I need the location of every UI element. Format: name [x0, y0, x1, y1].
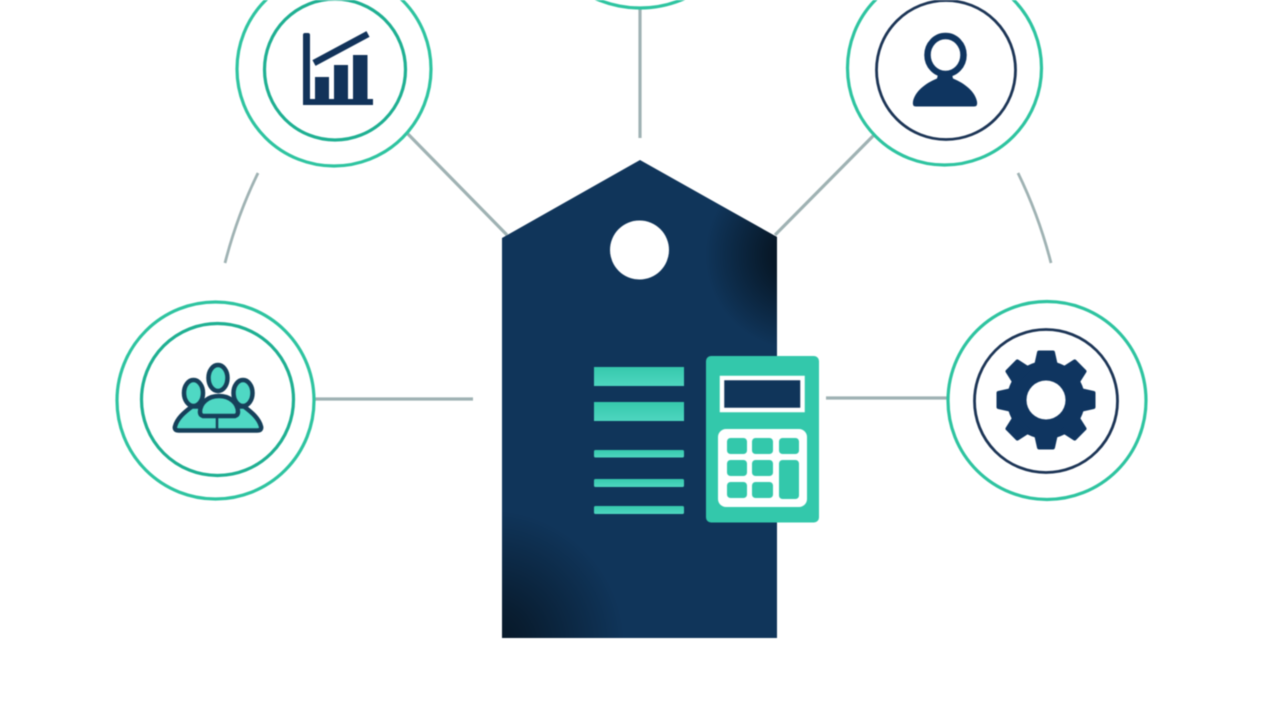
- icon: bar chart: [303, 33, 373, 105]
- ring: inner: [142, 324, 294, 476]
- ring: inner: [264, 0, 406, 140]
- tag shading: bottom left: [502, 160, 777, 638]
- text lines: [594, 367, 684, 514]
- node: analytics: [237, 0, 431, 166]
- connector lines: [225, 8, 1051, 399]
- node: team: [117, 302, 314, 499]
- node: top centre (cropped): [530, 0, 750, 8]
- icon: group of people: [175, 365, 261, 430]
- node: person: [848, 0, 1042, 165]
- tag body: [502, 160, 777, 638]
- icon: gear: [998, 352, 1094, 448]
- line: left: [296, 397, 473, 401]
- ring: inner: [876, 0, 1016, 140]
- node: settings: [948, 302, 1146, 500]
- calculator screen: [722, 378, 802, 410]
- ring: outer: [237, 0, 431, 166]
- line: top centre: [638, 8, 642, 138]
- ring: outer: [948, 302, 1146, 500]
- keypad: [718, 429, 807, 507]
- ring: outer: [848, 0, 1042, 165]
- ring: inner: [974, 330, 1118, 472]
- icon: person: [913, 36, 977, 106]
- tag hole: [610, 220, 669, 280]
- ring: outer: [117, 302, 314, 499]
- line: top right: [775, 134, 875, 235]
- arc: upper left: [225, 173, 258, 263]
- tag shading: top right: [502, 160, 777, 638]
- line: top left: [405, 131, 507, 235]
- price tag: [502, 160, 777, 638]
- calculator body: [706, 356, 819, 522]
- arc: upper right: [1018, 173, 1051, 263]
- line: right: [826, 396, 948, 400]
- calculator: [706, 356, 819, 522]
